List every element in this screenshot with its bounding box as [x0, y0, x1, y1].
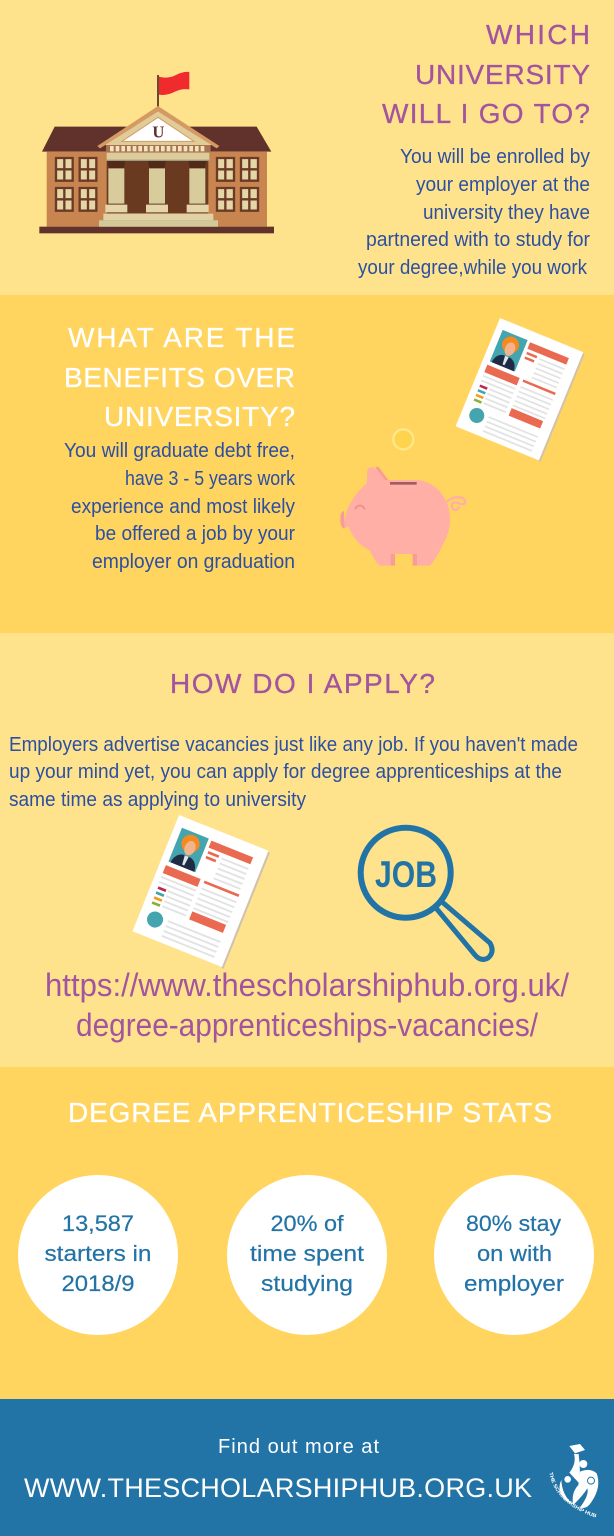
stat: time studying: studying — [261, 1271, 353, 1296]
text block: enrolment: university they have — [423, 202, 590, 224]
text block: apply: up your mind yet, you can apply for degree apprenticeships at the — [9, 761, 562, 783]
icon: coin and piggy bank — [340, 429, 465, 566]
text block: apply: Employers advertise vacancies just like any job. If you haven't made — [9, 734, 578, 756]
link: vacancies url: https://www.thescholarshiphub.org.uk/ — [45, 967, 569, 1003]
heading: which university: UNIVERSITY — [415, 59, 590, 90]
stat: starters — [18, 1175, 178, 1335]
icon: scholarship hub logo — [550, 1444, 598, 1518]
panel: degree apprenticeship stats — [0, 1067, 614, 1399]
stat: time studying: time spent — [250, 1241, 364, 1266]
icon: CV document — [132, 815, 270, 969]
stat: stay on: employer — [464, 1271, 564, 1296]
icon: scholarship hub logo: THE SCHOLARSHIP HUB — [550, 1472, 596, 1518]
icon: university building — [39, 72, 274, 233]
text block: enrolment — [358, 146, 590, 279]
stat: starters: 13,587 — [62, 1211, 134, 1236]
text block: enrolment: your degree,while you work — [358, 257, 588, 279]
stat: stay on: 80% stay — [466, 1211, 561, 1236]
panel: how do I apply — [0, 633, 614, 1067]
icon: CV document — [455, 318, 585, 462]
link: vacancies url — [45, 967, 569, 1043]
heading: which university — [382, 19, 590, 129]
heading: benefits: BENEFITS OVER — [64, 362, 295, 393]
windows — [56, 158, 258, 211]
stat: starters: 2018/9 — [62, 1271, 134, 1296]
heading: which university: WILL I GO TO? — [382, 98, 590, 129]
link: vacancies url: degree-apprenticeships-vacancies/ — [76, 1007, 538, 1043]
text block: benefits: be offered a job by your — [95, 523, 295, 545]
text block: enrolment: You will be enrolled by — [400, 146, 590, 168]
heading: which university: WHICH — [486, 19, 590, 50]
panel: benefits — [0, 295, 614, 633]
text block: enrolment: your employer at the — [416, 174, 590, 196]
heading: how do I apply: HOW DO I APPLY? — [170, 668, 435, 699]
heading: stats: DEGREE APPRENTICESHIP STATS — [68, 1097, 552, 1128]
stat: stay on: on with — [477, 1241, 552, 1266]
text block: benefits: experience and most likely — [71, 496, 295, 518]
heading: benefits: WHAT ARE THE — [68, 322, 295, 353]
stat: starters: starters in — [44, 1241, 152, 1266]
stat: stay on — [434, 1175, 594, 1335]
text block: enrolment: partnered with to study for — [366, 229, 590, 251]
text block: benefits: have 3 - 5 years work — [125, 468, 296, 490]
text block: benefits: employer on graduation — [92, 551, 295, 573]
stat: time studying — [227, 1175, 387, 1335]
text block: benefits — [64, 440, 296, 573]
text block: benefits: You will graduate debt free, — [64, 440, 295, 462]
text block: apply — [9, 734, 578, 811]
icon: job magnifier — [361, 828, 492, 959]
icon: job magnifier: JOB — [375, 854, 437, 895]
panel: footer — [0, 1399, 614, 1536]
panel: which university — [0, 0, 614, 295]
icon: university building: U — [152, 122, 164, 141]
text: find out more: Find out more at — [218, 1436, 379, 1458]
heading: benefits — [64, 322, 295, 432]
stat: time studying: 20% of — [270, 1211, 344, 1236]
text block: apply: same time as applying to university — [9, 789, 306, 811]
heading: benefits: UNIVERSITY? — [104, 401, 295, 432]
text: website: WWW.THESCHOLARSHIPHUB.ORG.UK — [24, 1473, 532, 1503]
